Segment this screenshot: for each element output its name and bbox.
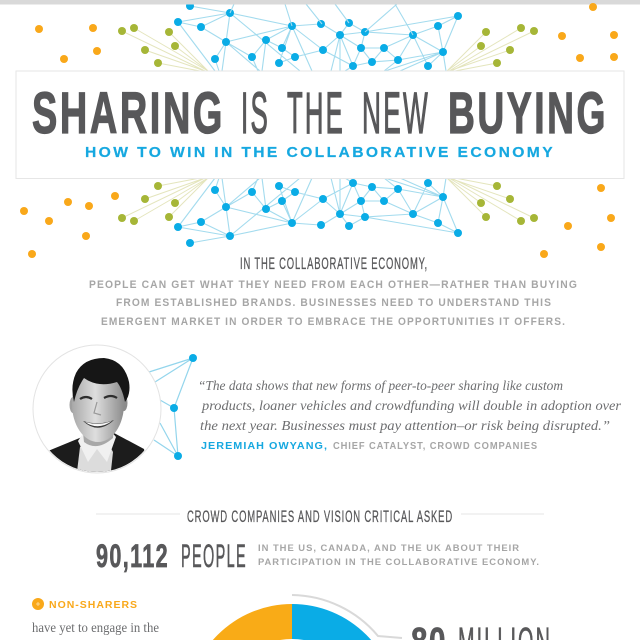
survey description: PARTICIPATION IN THE COLLABORATIVE ECONOMY. [258,557,540,568]
subtitle: HOW TO WIN IN THE COLLABORATIVE ECONOMY [85,145,555,161]
quote text: “The data shows that new forms of peer-to-peer sharing like custom [198,379,563,394]
intro paragraph: EMERGENT MARKET IN ORDER TO EMBRACE THE OPPORTUNITIES IT OFFERS. [101,316,566,328]
intro paragraph [89,279,578,328]
bottom network graphic [118,178,538,247]
title: NEW [362,81,430,146]
title [32,81,608,146]
quote attribution: CHIEF CATALYST, CROWD COMPANIES [333,440,538,452]
intro paragraph: FROM ESTABLISHED BRANDS. BUSINESSES NEED TO UNDERSTAND THIS [116,297,552,309]
quote attribution: JEREMIAH OWYANG, [201,440,328,452]
survey description [258,543,540,568]
title box [16,71,624,178]
title: THE [287,81,345,146]
quote network icon [149,354,197,460]
quote text [198,379,622,434]
stat: 90,112 people: 90,112 [96,538,169,574]
portrait photo [33,345,161,480]
quote text: the next year. Businesses must pay attention–or risk being disrupted.” [200,419,610,434]
non-sharers legend: NON-SHARERS [49,599,138,611]
top grey bar [0,0,640,4]
title: IS [241,81,270,146]
quote text: products, loaner vehicles and crowdfunding will double in adoption over [201,399,622,414]
survey description: IN THE US, CANADA, AND THE UK ABOUT THEIR [258,543,520,554]
non-sharers description: have yet to engage in the [32,620,159,635]
orange dots top [35,3,618,63]
orange dots bottom [20,184,615,258]
donut chart [187,595,402,640]
top network graphic [118,2,538,71]
intro paragraph: PEOPLE CAN GET WHAT THEY NEED FROM EACH OTHER—RATHER THAN BUYING [89,279,578,291]
intro heading: IN THE COLLABORATIVE ECONOMY, [240,254,428,273]
title: SHARING [32,81,225,146]
text: PEOPLE [181,538,247,574]
stat: 80 million [411,621,552,640]
quote attribution [201,440,538,452]
